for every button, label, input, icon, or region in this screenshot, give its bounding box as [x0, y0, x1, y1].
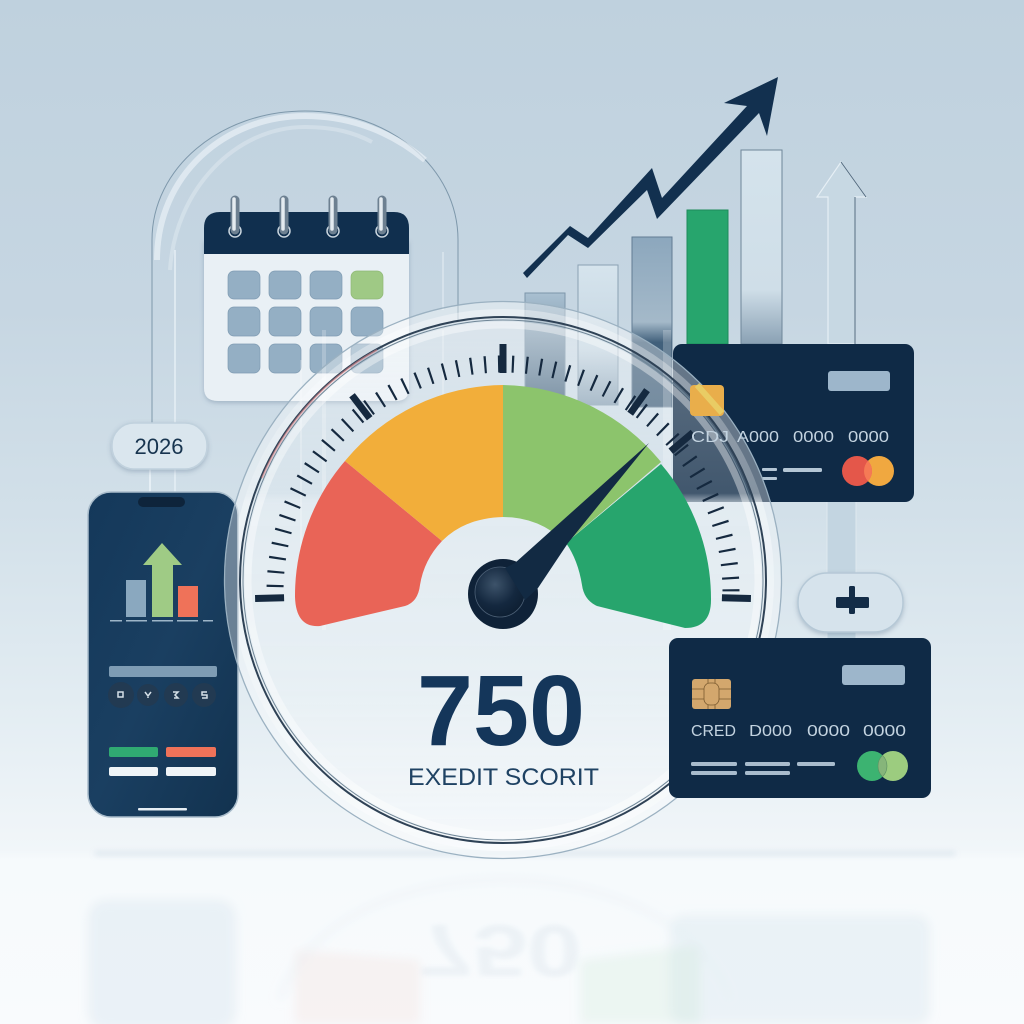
glass dome	[150, 111, 458, 492]
card lines	[691, 762, 835, 775]
phone status bars	[109, 747, 216, 776]
upper card number: 0000	[848, 429, 889, 446]
card number: D000	[749, 723, 792, 740]
upper card number	[691, 429, 889, 446]
upper card number: CDJ	[691, 429, 729, 446]
gauge segment: light green	[503, 385, 661, 543]
calendar icon	[204, 199, 409, 401]
phone notch	[138, 497, 185, 507]
floor reflection	[88, 880, 930, 1024]
upper card number: 0000	[793, 429, 834, 446]
plus pill	[798, 573, 903, 632]
bar 1	[525, 293, 565, 403]
minor ticks	[266, 356, 740, 592]
needle hub	[468, 559, 538, 629]
calendar day cells	[228, 271, 383, 373]
phone chart	[110, 543, 213, 622]
card number	[691, 723, 906, 740]
floor shadow	[95, 852, 955, 855]
phone	[88, 492, 238, 817]
phone buttons	[108, 682, 216, 708]
bar chart	[525, 150, 782, 407]
major ticks	[255, 344, 751, 598]
score label: EXEDIT SCORIT	[408, 764, 599, 791]
calendar header	[204, 212, 409, 254]
year pill	[112, 423, 207, 469]
card network logo	[842, 456, 894, 486]
phone label bar	[109, 666, 217, 677]
card label strip	[842, 665, 905, 685]
glass vertical reflections	[300, 330, 671, 630]
gauge	[224, 302, 782, 858]
upper credit card	[673, 344, 914, 502]
upper card number: A000	[737, 429, 779, 446]
bar 5	[741, 150, 782, 344]
upper card chip	[690, 385, 724, 416]
card lines	[762, 468, 822, 480]
card network logo	[857, 751, 908, 781]
year pill: 2026	[135, 434, 183, 459]
connector stem	[827, 500, 856, 640]
reflected score: 750	[418, 909, 582, 990]
outline up arrow	[817, 162, 866, 344]
phone home bar	[138, 808, 187, 810]
bar 3	[632, 237, 672, 407]
bar 4 green	[687, 210, 728, 344]
card number: CRED	[691, 723, 736, 740]
gauge segment: orange	[345, 385, 503, 541]
needle	[505, 443, 649, 600]
card number: 0000	[807, 723, 850, 740]
card number: 0000	[863, 723, 906, 740]
score value: 750	[417, 655, 585, 767]
calendar rings	[229, 199, 388, 237]
gauge segment: dark green	[566, 464, 711, 628]
glass disc	[232, 309, 774, 851]
gauge segment: red	[295, 461, 442, 626]
card chip	[692, 679, 731, 709]
glass ring	[224, 302, 782, 858]
lower credit card	[669, 638, 931, 798]
card label strip	[828, 371, 890, 391]
growth arrow	[523, 77, 778, 278]
calendar page	[204, 240, 409, 401]
bar 2	[578, 265, 618, 405]
